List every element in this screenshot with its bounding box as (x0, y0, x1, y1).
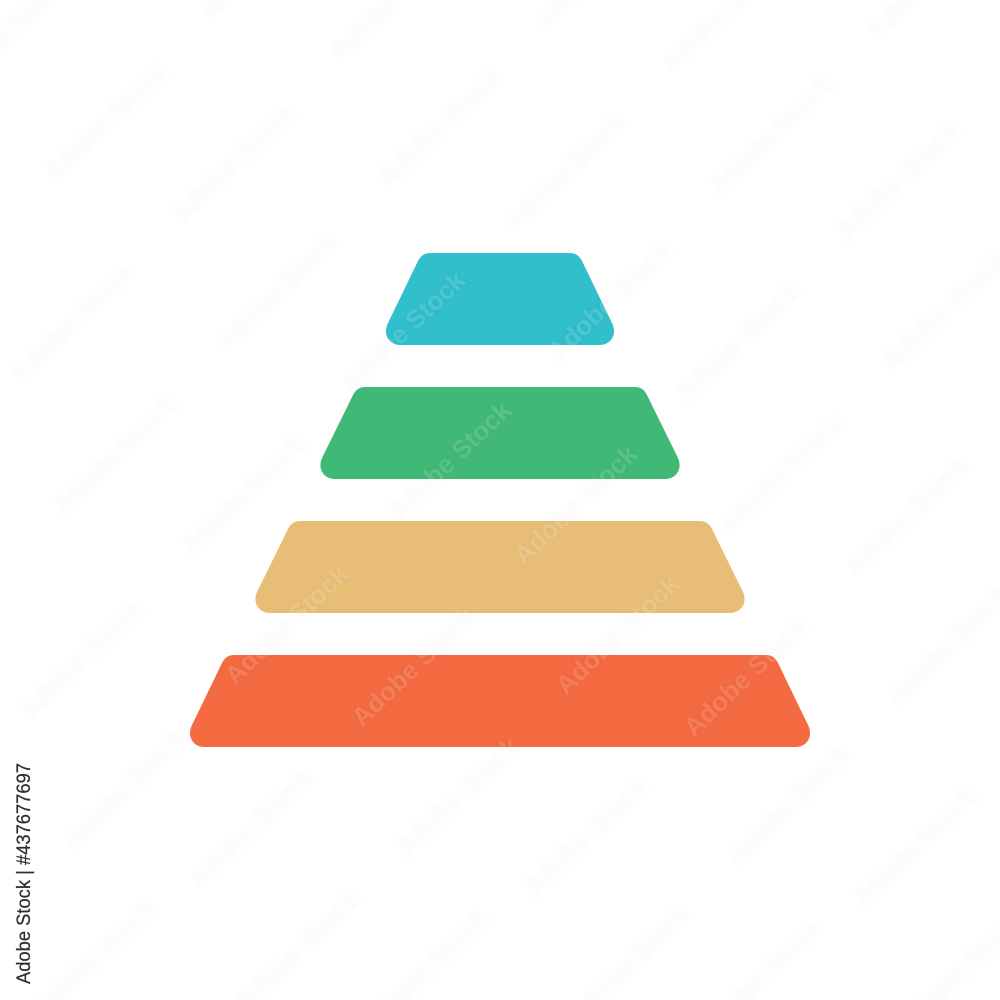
watermark: repeated stock text: Adobe Stock (183, 760, 319, 892)
watermark: repeated stock text: Adobe Stock (371, 60, 507, 192)
watermark: repeated stock text: Adobe Stock (13, 592, 149, 724)
watermark: repeated stock text: Adobe Stock (389, 730, 525, 862)
watermark: repeated stock text: Adobe Stock (507, 438, 643, 570)
watermark: repeated stock text: Adobe Stock (703, 68, 839, 200)
stock file id: Adobe Stock | #437677697 (13, 763, 35, 984)
watermark: repeated stock text: Adobe Stock (549, 568, 685, 700)
watermark: repeated stock text: Adobe Stock (669, 276, 805, 408)
watermark: repeated stock text: Adobe Stock (38, 54, 174, 186)
pyramid tier 1: teal top (386, 253, 614, 345)
watermark: repeated stock text: Adobe Stock (541, 234, 677, 366)
watermark: repeated stock text: Adobe Stock (829, 114, 965, 246)
watermark: repeated stock text: Adobe Stock (381, 394, 517, 526)
watermark: repeated stock text: Adobe Stock (47, 388, 183, 520)
pyramid tier 4: orange base (190, 655, 810, 747)
watermark: repeated stock text: Adobe Stock (839, 448, 975, 580)
watermark: repeated stock text: Adobe Stock (677, 610, 813, 742)
watermark: repeated stock text: Adobe Stock (345, 600, 481, 732)
watermark: repeated stock text: Adobe Stock (57, 722, 193, 854)
watermark: repeated stock text: Adobe Stock (165, 96, 301, 228)
watermark: repeated stock text: Adobe Stock (721, 738, 857, 870)
watermark: repeated stock text: Adobe Stock (175, 428, 311, 560)
watermark: repeated stock text: Adobe Stock (218, 558, 354, 690)
pyramid tier 2: green (320, 387, 680, 479)
watermark: repeated stock text: Adobe Stock (3, 256, 139, 388)
watermark: repeated stock text: Adobe Stock (209, 224, 345, 356)
pyramid tier 3: sand (255, 521, 745, 613)
watermark: repeated stock text: Adobe Stock (517, 770, 653, 902)
watermark: repeated stock text: Adobe Stock (713, 406, 849, 538)
watermark: repeated stock text: Adobe Stock (847, 780, 983, 912)
watermark: repeated stock text: Adobe Stock (335, 264, 471, 396)
watermark: repeated stock text: Adobe Stock (497, 104, 633, 236)
